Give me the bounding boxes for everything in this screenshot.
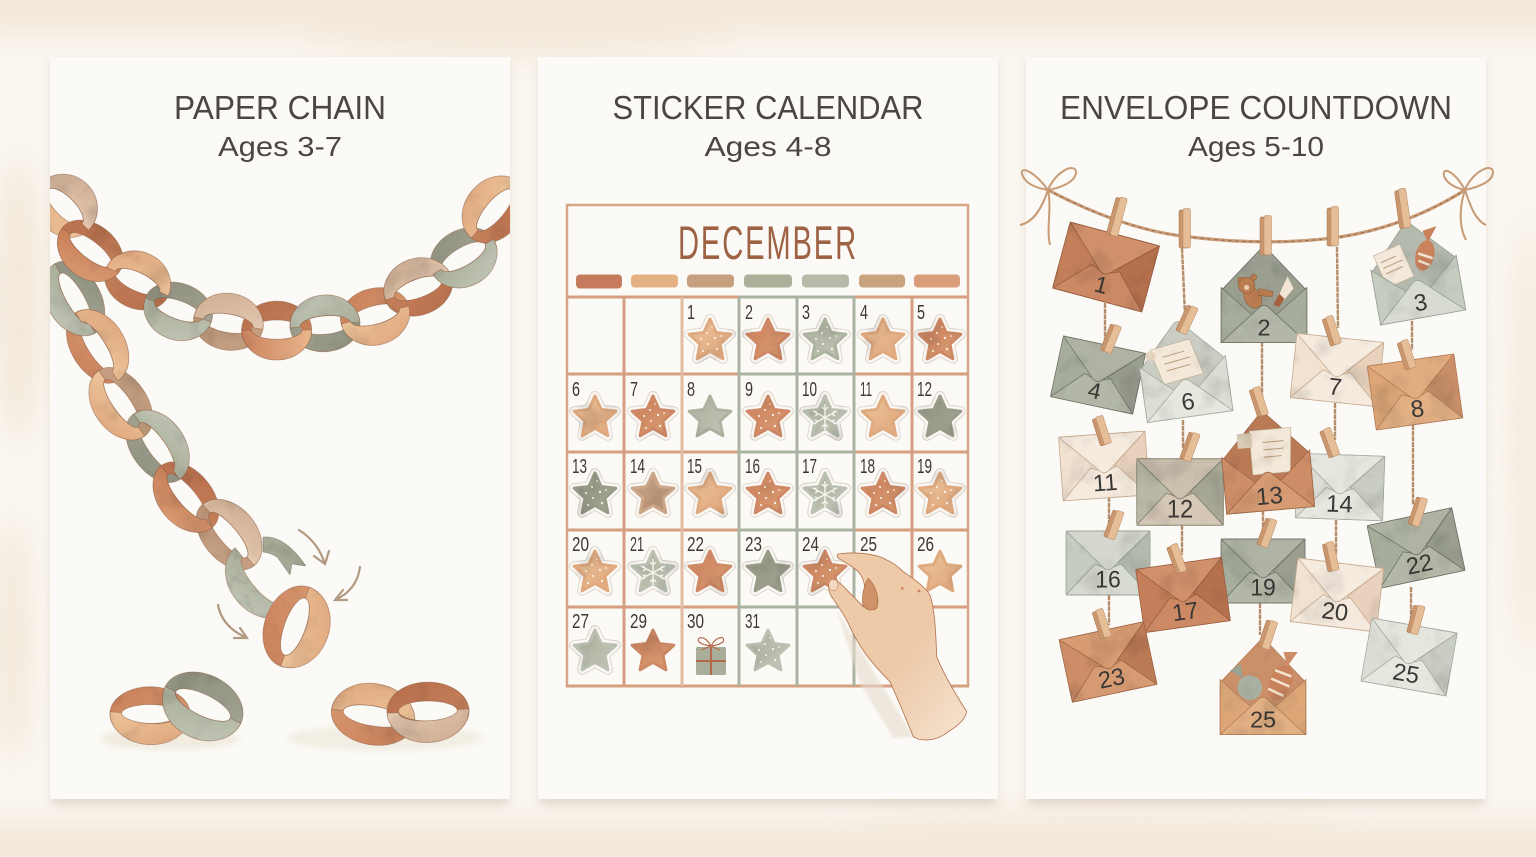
panel card (1026, 57, 1486, 799)
envelope 25 open with candy: 25 (1250, 706, 1276, 732)
calendar frame and grid (566, 205, 969, 686)
day 13 (572, 456, 616, 513)
day 17: 17 (802, 456, 817, 478)
weekday colour bars (576, 274, 960, 288)
envelope 4: 4 (1086, 377, 1104, 405)
month title: DECEMBER (678, 218, 858, 270)
envelope 7: 7 (1327, 373, 1343, 401)
day 3 (802, 302, 846, 359)
heading: envelope countdown: ENVELOPE COUNTDOWN (1060, 89, 1452, 126)
panel card (538, 57, 998, 799)
falling paper ring (252, 577, 342, 678)
subheading: ages: Ages 5-10 (1188, 131, 1324, 162)
day 16 (745, 456, 789, 513)
day 26: 26 (917, 534, 934, 556)
envelope 1: 1 (1092, 271, 1111, 299)
envelope 3 open with letter and candy: 3 (1412, 289, 1429, 317)
day 15: 15 (687, 456, 702, 478)
day 21: 21 (630, 534, 644, 556)
day 17 (802, 456, 846, 513)
day 15 (687, 456, 731, 513)
day 20 (572, 534, 616, 591)
subheading: ages: Ages 3-7 (218, 131, 342, 162)
envelope 6 open with letter: 6 (1180, 389, 1197, 416)
day 12: 12 (917, 379, 932, 401)
panel card (50, 57, 510, 799)
day 31 (745, 611, 789, 670)
day 10 (802, 379, 846, 436)
heading: paper chain: PAPER CHAIN (174, 89, 386, 126)
loose ribbon end (263, 537, 306, 575)
heading: sticker calendar: STICKER CALENDAR (612, 89, 924, 126)
envelope 7 (1290, 333, 1384, 407)
envelope 11: 11 (1092, 470, 1118, 498)
day 5 (917, 302, 961, 359)
day 21 (630, 534, 674, 591)
envelopes (1050, 216, 1466, 735)
envelope 25 right: 25 (1391, 659, 1421, 690)
panel: sticker calendar (538, 57, 998, 804)
day 6 (572, 379, 616, 436)
day 31: 31 (745, 611, 760, 633)
envelope 4 (1050, 336, 1146, 414)
envelope 17 (1136, 557, 1230, 633)
envelope 20: 20 (1320, 598, 1349, 627)
clothespins (1092, 188, 1428, 650)
envelope 1 (1053, 222, 1159, 312)
day 10: 10 (802, 379, 817, 401)
day 22: 22 (687, 534, 704, 556)
day 18 (860, 456, 904, 513)
day 6: 6 (572, 379, 580, 401)
envelope 17: 17 (1171, 598, 1200, 627)
envelope 13 open with scroll (1218, 409, 1315, 514)
calendar (566, 205, 969, 740)
envelope 16 (1066, 531, 1150, 595)
day 30 with gift: 30 (687, 611, 704, 633)
panel card shadow (52, 62, 508, 804)
panel: envelope countdown (1020, 57, 1493, 804)
day 12 (917, 379, 961, 436)
twine garland with bows (1020, 168, 1493, 245)
day 18: 18 (860, 456, 875, 478)
envelope 8: 8 (1409, 395, 1426, 424)
panel card shadow (540, 62, 996, 804)
envelope 25 open with candy (1220, 640, 1306, 735)
day 29 (630, 611, 674, 670)
day 19: 19 (917, 456, 932, 478)
day 1: 1 (687, 302, 695, 324)
day 5: 5 (917, 302, 925, 324)
day 8: 8 (687, 379, 695, 401)
envelope 14 (1295, 453, 1385, 521)
day 11 (860, 379, 904, 436)
day 9: 9 (745, 379, 753, 401)
day 13: 13 (572, 456, 587, 478)
day stickers (572, 302, 961, 675)
envelope 13 open with scroll: 13 (1255, 482, 1284, 511)
envelope 20 (1290, 558, 1384, 632)
ring pair: left (100, 659, 254, 754)
envelope 22 (1367, 508, 1465, 588)
panel card shadow (1028, 62, 1484, 804)
envelope 11 (1059, 431, 1149, 501)
day 24 (802, 534, 846, 591)
day 27: 27 (572, 611, 589, 633)
hanging twine strands (1105, 247, 1413, 635)
day 7: 7 (630, 379, 638, 401)
envelope 16: 16 (1095, 566, 1121, 593)
envelope 2 open with teddy bear (1221, 248, 1307, 343)
envelope 22: 22 (1404, 550, 1435, 581)
day 4: 4 (860, 302, 868, 324)
day 11: 11 (860, 379, 872, 401)
arrow: right (335, 567, 360, 600)
day 19 (917, 456, 961, 513)
day 14: 14 (630, 456, 645, 478)
ring pair: right (287, 677, 483, 752)
envelope 6 open with letter (1134, 316, 1233, 423)
day 2 (745, 302, 789, 359)
day 23: 23 (745, 534, 762, 556)
day 9 (745, 379, 789, 436)
day 8 (687, 379, 731, 436)
envelope 2 open with teddy bear: 2 (1257, 314, 1271, 340)
day 30 with gift (687, 611, 726, 675)
day 22 (687, 534, 731, 591)
day 16: 16 (745, 456, 760, 478)
day 7 (630, 379, 674, 436)
envelope 3 open with letter and candy (1364, 216, 1466, 325)
day 20: 20 (572, 534, 589, 556)
day 1 (687, 302, 731, 359)
arrow: left (218, 605, 247, 638)
day 25: 25 (860, 534, 877, 556)
day 27 (572, 611, 616, 670)
envelope 19: 19 (1250, 574, 1276, 601)
envelope 23 (1059, 622, 1157, 702)
day 14 (630, 456, 674, 513)
envelope 19 (1221, 539, 1305, 603)
illustration: hanging paper chain garland (50, 174, 510, 570)
hand placing a sticker (829, 553, 967, 740)
day 29: 29 (630, 611, 647, 633)
envelope 12: 12 (1167, 496, 1193, 524)
envelope 25 right (1361, 618, 1457, 696)
envelope 14: 14 (1326, 490, 1353, 518)
day 26 (917, 534, 961, 591)
arrow: top right (299, 530, 329, 564)
envelope 23: 23 (1096, 664, 1127, 695)
subheading: ages: Ages 4-8 (704, 131, 832, 162)
panel: paper chain (22, 57, 539, 804)
day 23 (745, 534, 789, 591)
breaking link (210, 548, 289, 633)
day 2: 2 (745, 302, 753, 324)
day 3: 3 (802, 302, 810, 324)
envelope 8 (1367, 354, 1463, 430)
day 4 (860, 302, 904, 359)
envelope 12 (1137, 459, 1223, 525)
day 24: 24 (802, 534, 819, 556)
